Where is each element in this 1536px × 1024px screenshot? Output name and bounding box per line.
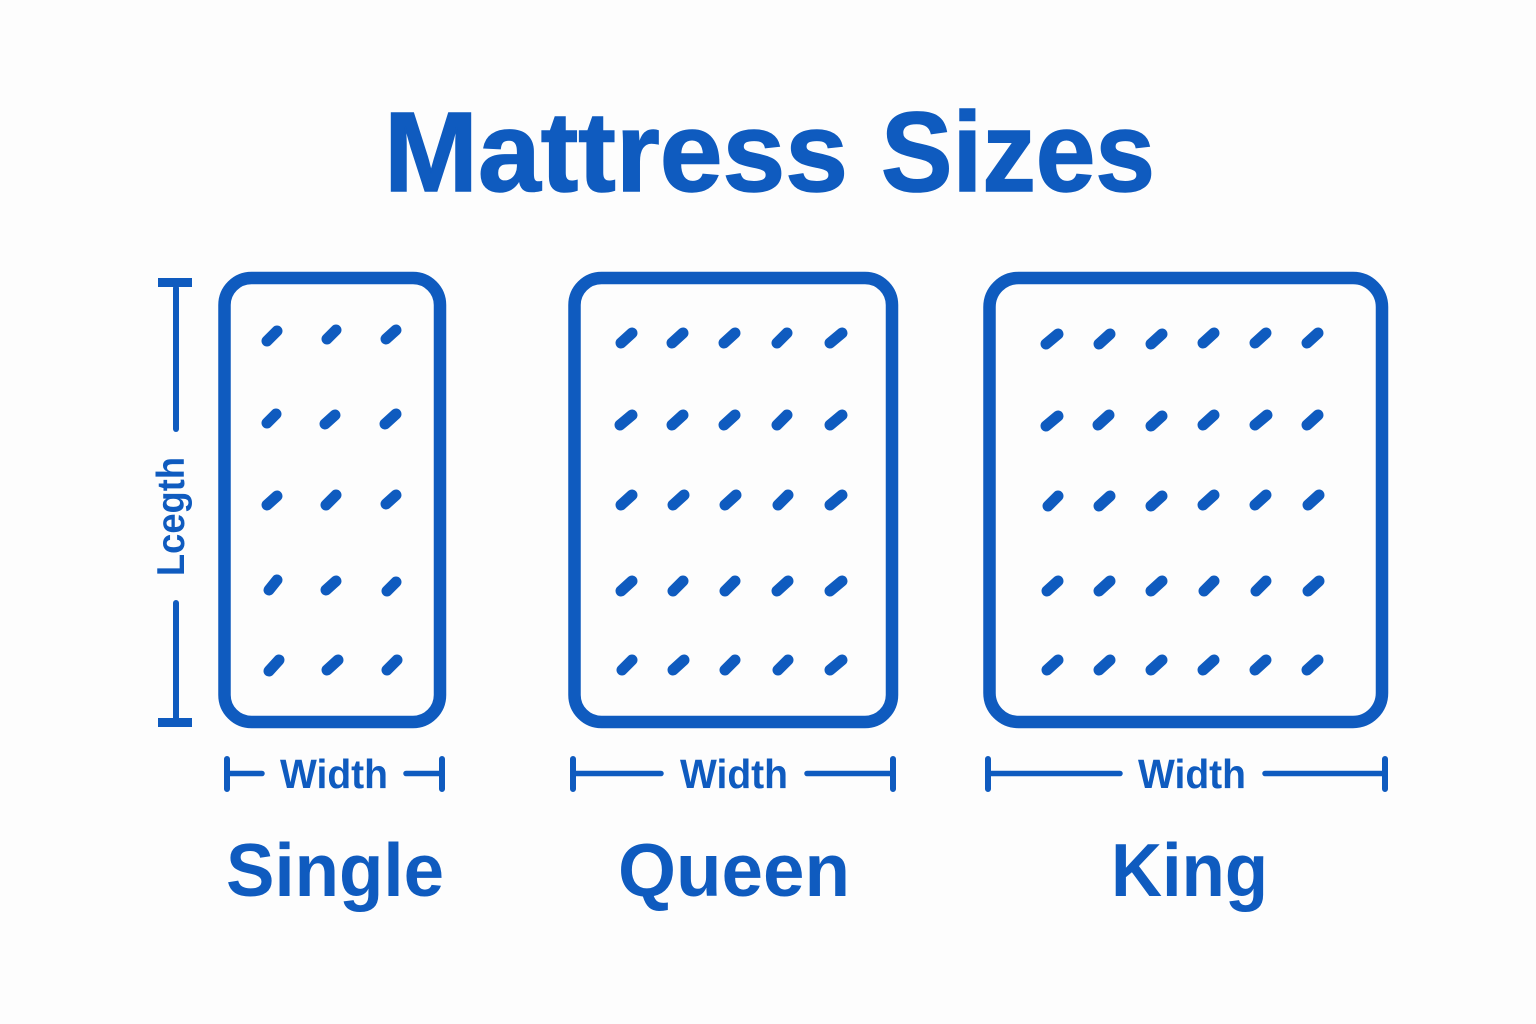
width label: single: Width bbox=[280, 751, 388, 797]
width dimension: king bbox=[988, 759, 1385, 789]
tufts: single bbox=[267, 330, 397, 671]
mattress outline: queen bbox=[574, 278, 892, 722]
name: queen: Queen bbox=[618, 828, 850, 912]
tufts: queen bbox=[620, 333, 842, 670]
name: single: Single bbox=[226, 828, 444, 912]
title: Mattress bbox=[384, 89, 848, 215]
title bbox=[384, 89, 1155, 215]
length label: Lcegth bbox=[150, 457, 193, 576]
panel: queen mattress bbox=[573, 278, 893, 912]
width dimension: single bbox=[227, 759, 442, 789]
mattress outline: single bbox=[224, 278, 440, 722]
panel: king mattress bbox=[988, 278, 1385, 912]
width dimension: queen bbox=[573, 759, 893, 789]
tufts: king bbox=[1046, 333, 1319, 670]
title: Sizes bbox=[881, 89, 1155, 215]
panel: single mattress bbox=[224, 278, 444, 912]
width label: queen: Width bbox=[680, 751, 788, 797]
mattress outline: king bbox=[990, 278, 1382, 722]
width label: king: Width bbox=[1138, 751, 1246, 797]
length dimension marker bbox=[150, 278, 193, 727]
name: king: King bbox=[1111, 828, 1268, 912]
